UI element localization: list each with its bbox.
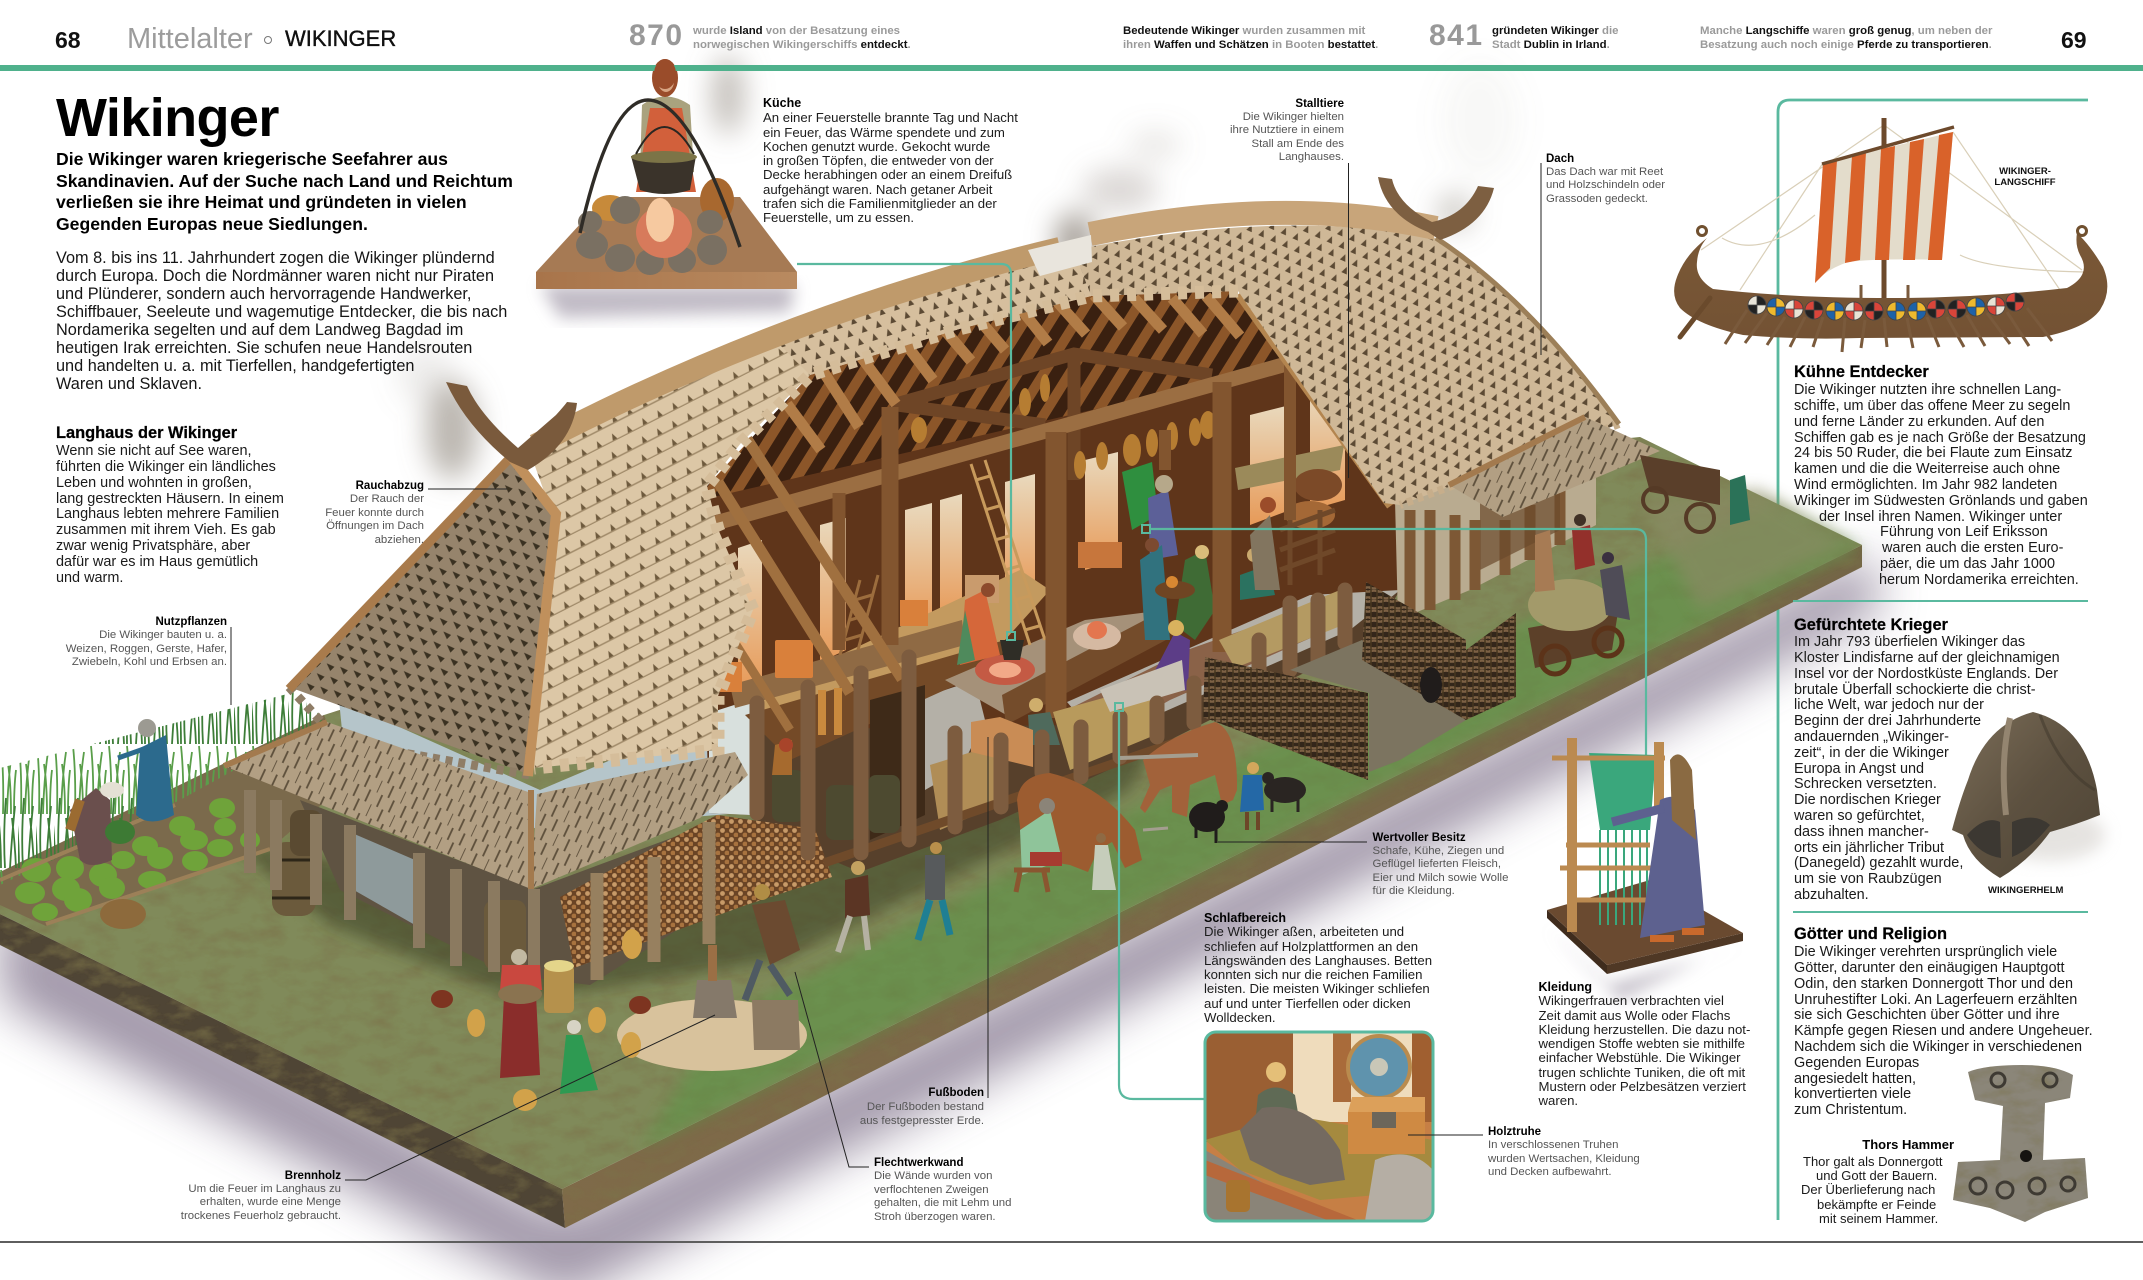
seated woman <box>1028 712 1060 745</box>
barrels under eaves <box>272 810 526 970</box>
loom shadow <box>1545 925 1750 1000</box>
text: Thors Hammer: bekämpfte er Feinde <box>1817 1197 1936 1212</box>
label: Brennholz: Um die Feuer im Langhaus zu erhalten, wurde eine Menge trockenes Feuerholz gebraucht. <box>181 1182 341 1222</box>
fact: 841 text: gründeten Wikinger die Stadt Dublin in Irland. <box>1492 25 1618 51</box>
label: Schlafbereich: Die Wikinger aßen, arbeiteten und schliefen auf Holzplattformen an den Längswänden des Langhauses. Betten konnten sich nur die reichen Familien leisten. Die meisten Wikinger schliefen auf und unter Tierfellen oder dicken Wolldecken. <box>1204 924 1432 1025</box>
cow 2 <box>1140 722 1237 817</box>
hull <box>1674 233 2107 339</box>
brick path <box>1063 610 1340 740</box>
loom cloth <box>1589 753 1656 830</box>
man teal <box>925 855 945 900</box>
wall below roof: gable <box>339 700 752 830</box>
header: chapter: Mittelalter <box>127 23 253 55</box>
woven cloth on inner loom <box>1122 462 1158 530</box>
child green <box>560 1035 598 1094</box>
label: Dach: Das Dach war mit Reet und Holzschindeln oder Grassoden gedeckt. <box>1546 166 1665 205</box>
cauldron <box>1000 640 1024 660</box>
cook figure <box>636 59 696 192</box>
fact: 841 number: 841 <box>1429 19 1484 52</box>
ground: bright grass strip <box>640 505 1862 1150</box>
figure: bending woman <box>70 782 135 865</box>
woman red <box>500 975 540 1078</box>
main roof <box>289 177 1619 776</box>
ground: right side <box>562 545 1862 1228</box>
skirt roof left <box>224 722 534 889</box>
ground: left side <box>0 914 565 1228</box>
label: Nutzpflanzen: Die Wikinger bauten u. a. Weizen, Roggen, Gerste, Hafer, Zwiebeln, Kohl und Erbsen an. <box>66 629 227 668</box>
inset border <box>1205 1032 1433 1221</box>
porch posts <box>250 790 709 980</box>
hearth stones <box>576 196 727 275</box>
loom threads <box>1600 830 1647 925</box>
hay loft <box>1235 445 1344 490</box>
header: section: WIKINGER <box>285 26 396 51</box>
label: Rauchabzug: Der Rauch der Feuer konnte durch Öffnungen im Dach abziehen. <box>325 493 424 546</box>
intro: Die Wikinger waren kriegerische Seefahrer aus Skandinavien. Auf der Suche nach Land und Reichtum verließen sie ihre Heimat und gründeten in vielen Gegenden Europas neue Siedlungen. <box>56 149 513 234</box>
text: Gefürchtete Krieger: Gefürchtete Krieger <box>1794 616 1948 634</box>
cauldron <box>631 156 696 194</box>
timber posts and main beam <box>712 350 1315 730</box>
label: Flechtwerkwand: Die Wände wurden von verflochtenen Zweigen gehalten, die mit Lehm und Stroh überzogen waren. <box>874 1170 1011 1223</box>
loom frame <box>1572 738 1659 932</box>
man at cart <box>1600 565 1630 620</box>
rudder <box>1680 298 1710 337</box>
text: Langhaus der Wikinger: Wenn sie nicht auf See waren, führten die Wikinger ein ländliches Leben und wohnten in großen, lang gestreckten Häusern. In einem Langhaus lebten mehrere Familien zusammen mit ihrem Vieh. Es gab zwar wenig Privatsphäre, aber dafür war es im Haus gemütlich und warm. <box>56 443 284 586</box>
label: Wikingerlangschiff: WIKINGER- LANGSCHIFF <box>1994 166 2056 188</box>
axeman <box>752 900 800 965</box>
child blue <box>1240 775 1264 812</box>
sheep black <box>1189 802 1225 832</box>
cook's head over header bar <box>654 59 676 89</box>
text: Gefürchtete Krieger: Im Jahr 793 überfielen Wikinger das Kloster Lindisfarne auf der gleichnamigen Insel vor der Nordostküste Englands. Der brutale Überfall schockierte die christ- liche Welt, war jedoch nur der Beginn der drei Jahrhunderte andauernden „Wikinger- zeit“, in der die Wikinger Europa in Angst und Schrecken versetzten. Die nordischen Krieger waren so gefürchtet, dass ihnen mancher- orts ein jährlicher Tribut (Danegeld) gezahlt wurde, um sie von Raubzügen abzuhalten. <box>1794 634 2060 903</box>
skirt roof right <box>531 752 748 889</box>
connector: kitchen <box>797 264 1015 640</box>
wall: lower pale panels <box>345 830 415 925</box>
wall panels <box>738 392 1345 690</box>
group at table <box>1140 538 1275 640</box>
label: Schlafbereich: Schlafbereich <box>1204 911 1286 925</box>
cow 1 <box>1017 773 1142 872</box>
wood chips <box>617 999 807 1071</box>
people front <box>431 455 1750 1111</box>
loom weaver <box>1640 797 1705 938</box>
right end wall <box>1395 470 1596 620</box>
green frame of side column <box>1778 100 2088 1220</box>
stalled cows <box>1285 469 1342 529</box>
shield <box>1348 1036 1410 1098</box>
label: Nutzpflanzen: Nutzpflanzen <box>155 616 227 628</box>
roof: right long section <box>1074 226 1619 505</box>
yellow barrel <box>544 965 574 1013</box>
ground: stones at far right <box>1640 490 1850 610</box>
viking helmet <box>1952 712 2105 878</box>
roof: ridge cap <box>535 248 1060 445</box>
label: Brennholz: Brennholz <box>285 1170 341 1182</box>
fur 2 <box>1365 1154 1433 1221</box>
text: Kühne Entdecker: Kühne Entdecker <box>1794 363 1929 381</box>
kitchen inset <box>536 59 797 289</box>
rafters: lit <box>787 295 1240 450</box>
garden <box>0 692 350 929</box>
pale end wall <box>709 700 750 815</box>
label: Rauchabzug: Rauchabzug <box>356 480 424 492</box>
garden fence <box>0 805 270 924</box>
roof: top strip <box>780 250 1091 375</box>
label: Holztruhe: Holztruhe <box>1488 1126 1541 1138</box>
house floor <box>715 585 1400 872</box>
text: Götter und Religion: Götter und Religion <box>1794 925 1947 943</box>
figure: woman spinning <box>1150 620 1190 695</box>
rigging <box>1701 125 2085 290</box>
stall fence <box>1280 510 1335 585</box>
hanging hams <box>911 374 1216 479</box>
Thor's hammer <box>1953 1065 2088 1222</box>
roof: cut edge teeth <box>534 291 1238 768</box>
label: Holztruhe: In verschlossenen Truhen wurden Wertsachen, Kleidung und Decken aufbewahrt. <box>1488 1139 1640 1178</box>
wood wall <box>1205 1032 1293 1142</box>
label: Fußboden <box>860 1087 984 1127</box>
ladder <box>971 460 1045 645</box>
label: Wertvoller Besitz: Schafe, Kühe, Ziegen und Geflügel lieferten Fleisch, Eier und Milch sowie Wolle für die Kleidung. <box>1372 844 1508 897</box>
skirt roof far right <box>1449 417 1660 517</box>
smoke hole <box>1028 235 1092 276</box>
big crate <box>971 717 1033 767</box>
figure: woman in blue <box>118 719 174 822</box>
bed frame <box>1205 1150 1330 1221</box>
fact: 870 text: wurde Island von der Besatzung eines norwegischen Wikingerschiffs entdeckt. <box>693 25 911 51</box>
loom inset <box>1545 738 1750 1000</box>
front stockade posts <box>757 590 1345 853</box>
fact: longships: Manche Langschiffe waren groß genug, um neben der Besatzung auch noch einige Pferde zu transportieren. <box>1700 25 1992 51</box>
label: Stalltiere: Stalltiere <box>1295 98 1344 110</box>
roof: dark gable hip <box>289 455 555 774</box>
sleeping area inset <box>1205 1032 1433 1221</box>
sill along stockade <box>824 737 1191 863</box>
animals <box>1017 667 1442 872</box>
right brace <box>1240 293 1392 505</box>
woman at barrel <box>772 740 792 775</box>
label: Flechtwerkwand: Flechtwerkwand <box>874 1157 963 1169</box>
wooden sill <box>730 620 965 708</box>
milk maid <box>1092 845 1116 890</box>
ground slab <box>0 437 1862 1228</box>
header: page number left: 68 <box>55 27 81 53</box>
stool <box>1014 870 1050 892</box>
fire <box>636 206 692 258</box>
green header bar <box>0 65 2143 71</box>
man brown <box>845 875 870 918</box>
label: Fußboden: Der Fußboden bestand aus festgepresster Erde. <box>860 1101 984 1127</box>
slab top <box>536 197 797 272</box>
connector: clothing <box>1142 525 1646 755</box>
chickens <box>467 929 642 1111</box>
roof: hip boards <box>289 458 510 689</box>
smoke: chimney plumes <box>397 55 1520 480</box>
jar and bread <box>700 178 734 222</box>
body text: Vom 8. bis ins 11. Jahrhundert zogen die Wikinger plündernd durch Europa. Doch die Nordmänner waren nicht nur Piraten und Plünderer, sondern auch hervorragende Handwerker, Schiffbauer, Seeleute und wagemutige Entdecker, die bis nach Nordamerika segelten und auf dem Landweg Bagdad im heutigen Irak erreichten. Sie schufen neue Handelsrouten und handelten u. a. mit Tierfellen, handgefertigten Waren und Sklaven. <box>56 248 507 392</box>
chest <box>1348 1112 1425 1154</box>
chests <box>720 542 1122 692</box>
sail <box>1815 132 1953 283</box>
skirt edge boards <box>224 417 1585 889</box>
label: Kleidung: Wikingerfrauen verbrachten viel Zeit damit aus Wolle oder Flachs Kleidung herzustellen. Die dazu not- wendigen Stoffe webten sie mithilfe einfacher Webstühle. Die Wikinger trugen schlichte Tuniken, die oft mit Mustern oder Pelzbesätzen verziert waren. <box>1538 993 1750 1108</box>
fact: 870 number: 870 <box>629 19 684 52</box>
wattle fence back <box>1362 582 1466 720</box>
label: Dach: Dach <box>1546 152 1574 164</box>
cart with hay <box>1528 612 1618 668</box>
text: Kühne Entdecker: Die Wikinger nutzten ihre schnellen Lang- schiffe, um über das offene Meer zu segeln und ferne Länder zu erkunden. Auf den Schiffen gab es je nach Größe der Besatzung 24 bis 50 Ruder, die bei Flaute zum Einsatz kamen und die die Weiterreise auch ohne Wind ermöglichten. Im Jahr 982 landeten Wikinger im Südwesten Grönlands und gaben der Insel ihren Namen. Wikinger unter Führung von Leif Eriksson waren auch die ersten Euro- päer, die um das Jahr 1000 herum Nordamerika erreichten. <box>1794 382 2088 588</box>
column separators <box>1793 601 2088 912</box>
tripod <box>580 100 740 247</box>
label: Küche: Küche <box>763 96 801 110</box>
text: Thors Hammer: und Gott der Bauern. <box>1816 1168 1937 1183</box>
interior <box>700 291 1400 815</box>
ground: building shadow <box>230 660 1200 1000</box>
header: page number right: 69 <box>2061 27 2087 53</box>
chopping blocks <box>693 980 737 1018</box>
house interior hay and rugs <box>772 590 1343 840</box>
shields <box>1748 293 2024 320</box>
title: Wikinger <box>56 88 279 148</box>
spiral prows <box>1698 226 2086 236</box>
figure: stable woman <box>1250 497 1280 590</box>
door and wall <box>870 685 925 840</box>
rafters <box>707 291 1400 525</box>
slab front <box>536 272 797 289</box>
ground: grass top <box>0 437 1862 1189</box>
shadow: kitchen slab <box>540 285 795 318</box>
label: Wertvoller Besitz: Wertvoller Besitz <box>1372 832 1466 844</box>
mast <box>1882 118 1886 298</box>
gable horns <box>446 382 577 470</box>
wattle fence front <box>1203 657 1368 780</box>
label: Küche: An einer Feuerstelle brannte Tag und Nacht ein Feuer, das Wärme spendete und zum Kochen genutzt wurde. Gekocht wurde in großen Töpfen, die entweder von der Decke herabhingen oder an einem Dreifuß aufgehängt waren. Nach getaner Arbeit trafen sich die Familienmitglieder an der Feuerstelle, um zu essen. <box>763 110 1018 225</box>
pale wall <box>1293 1034 1412 1122</box>
text: Thors Hammer: Der Überlieferung nach <box>1801 1182 1935 1197</box>
back wall <box>700 358 1400 815</box>
milker <box>1020 810 1062 875</box>
longship <box>1674 118 2107 352</box>
ground shadow <box>0 555 1880 1280</box>
wall: lower dark part <box>300 800 725 985</box>
hay <box>1205 1115 1433 1200</box>
gray floor <box>1067 590 1400 740</box>
hearth <box>945 610 1165 716</box>
text: Thors Hammer: mit seinem Hammer. <box>1819 1211 1938 1226</box>
text: Götter und Religion: Die Wikinger verehrten ursprünglich viele Götter, darunter den einäugigen Hauptgott Odin, den starken Donnergott Thor und den Unruhestifter Loki. An Lagerfeuern erzählten sie sich Geschichten über Götter und ihre Kämpfe gegen Riesen und andere Ungeheuer. Nachdem sich die Wikinger in verschiedenen Gegenden Europas angesiedelt hatten, konvertierten viele zum Christentum. <box>1794 944 2093 1118</box>
ladder small <box>840 575 878 655</box>
leader lines <box>231 163 1541 1180</box>
fact: burials: Bedeutende Wikinger wurden zusammen mit ihren Waffen und Schätzen in Booten bestattet. <box>1123 25 1378 51</box>
text: Thors Hammer: Thor galt als Donnergott <box>1803 1154 1942 1169</box>
lettuce rows <box>15 798 260 921</box>
header: ring bullet <box>264 36 272 44</box>
figure: cook <box>957 583 1000 665</box>
oars <box>1725 285 2052 352</box>
fur <box>1240 1107 1345 1185</box>
label: Wikingerhelm: WIKINGERHELM <box>1988 885 2063 896</box>
loom base <box>1547 910 1607 974</box>
label: Fußboden: Fußboden <box>928 1087 984 1099</box>
back people <box>1572 525 1595 570</box>
yard <box>1822 127 1954 164</box>
woodpile <box>560 815 832 968</box>
inner beams <box>890 354 1212 480</box>
animal pen gravel <box>1290 640 1466 772</box>
wattle fence side <box>1466 613 1516 720</box>
sleeping platform <box>745 570 1050 745</box>
figure: weaver <box>1148 475 1178 560</box>
bucket <box>1226 1180 1250 1212</box>
text: Langhaus der Wikinger: Langhaus der Wikinger <box>56 424 237 442</box>
caption heading: Thors Hammer <box>1862 1137 1954 1152</box>
roof: lit front section <box>530 250 1091 768</box>
label: Stalltiere: Die Wikinger hielten ihre Nutztiere in einem Stall am Ende des Langhauses. <box>1230 110 1344 163</box>
connector: sleeping area <box>1115 703 1205 1099</box>
label: Kleidung: Kleidung <box>1538 980 1592 994</box>
text: Thors Hammer <box>1801 1137 1954 1226</box>
crop field <box>0 692 325 885</box>
back wagon <box>1640 455 1720 505</box>
garden soil <box>0 715 350 926</box>
basket of roots <box>100 899 146 929</box>
storage barrels <box>772 770 900 840</box>
onion strings <box>822 688 838 735</box>
bottom rule <box>0 1241 2143 1243</box>
person <box>1256 1088 1298 1114</box>
